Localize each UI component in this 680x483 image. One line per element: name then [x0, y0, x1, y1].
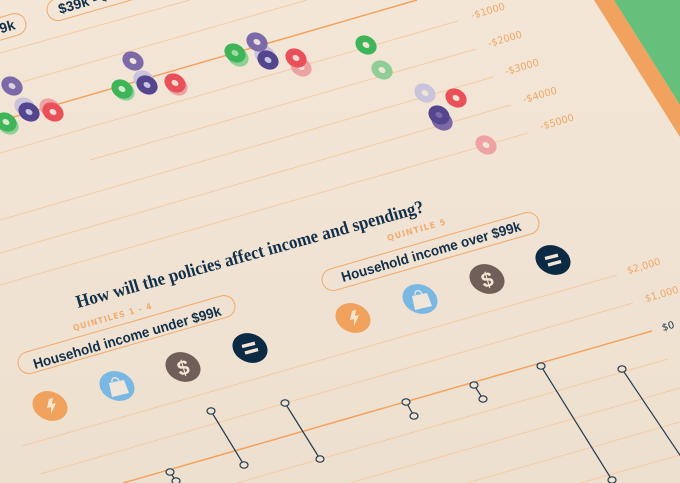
icon: equals, quintiles 1-4 — [228, 328, 272, 368]
dot group 3 — [221, 29, 315, 80]
y axis labels, bottom chart: $2,000 — [626, 257, 662, 277]
icon: dollar, quintiles 1-4: $ — [175, 356, 193, 381]
green corner — [614, 0, 680, 105]
icon: dollar, quintiles 1-4 — [161, 347, 205, 387]
pill: $39k bracket — [44, 0, 267, 23]
y axis labels, bottom chart — [626, 257, 680, 334]
pill: top left income bracket — [0, 11, 29, 94]
dumbbell 3 — [281, 400, 324, 462]
dot group 4 — [352, 32, 500, 158]
dumbbell 6 — [537, 363, 616, 483]
icon: energy, quintile 5 — [331, 298, 375, 338]
y axis labels, bottom chart: $1,000 — [644, 285, 680, 305]
dumbbell 1 — [166, 469, 180, 483]
dumbbell 4 — [402, 399, 418, 419]
dumbbell 7 — [618, 366, 680, 470]
icon: dollar, quintile 5: $ — [479, 268, 497, 293]
icon: equals, quintile 5 — [531, 240, 575, 280]
dumbbell 2 — [207, 408, 248, 468]
icon: energy, quintiles 1-4 — [28, 386, 72, 426]
dot group 1 — [0, 73, 67, 138]
y axis labels, top chart: -$5000 — [539, 113, 575, 133]
icon: dollar, quintile 5 — [465, 259, 509, 299]
y axis labels, bottom chart: $0 — [661, 320, 676, 334]
bottom chart grid lines — [22, 275, 680, 483]
orange page border — [594, 0, 680, 137]
icon: shopping bag, quintiles 1-4 — [95, 366, 139, 406]
label: quintile 5: QUINTILE 5 — [386, 216, 448, 243]
top chart grid lines — [0, 0, 528, 285]
y axis labels, top chart: -$3000 — [504, 58, 540, 78]
title: How will the policies affect income and spending? — [73, 197, 426, 312]
y axis labels, top chart — [470, 2, 575, 133]
dot group 2 — [108, 48, 191, 104]
pill: household income over $99k: Household income over $99k — [339, 218, 523, 285]
y axis labels, top chart: -$2000 — [487, 30, 523, 50]
icon: shopping bag, quintile 5 — [398, 279, 442, 319]
label: quintiles 1-4: QUINTILES 1 - 4 — [72, 301, 154, 333]
y axis labels, top chart: -$1000 — [470, 2, 506, 22]
y axis labels, top chart: -$4000 — [522, 86, 558, 106]
pill: household income under $99k: Household income under $99k — [31, 303, 223, 372]
dumbbell 5 — [470, 382, 487, 402]
